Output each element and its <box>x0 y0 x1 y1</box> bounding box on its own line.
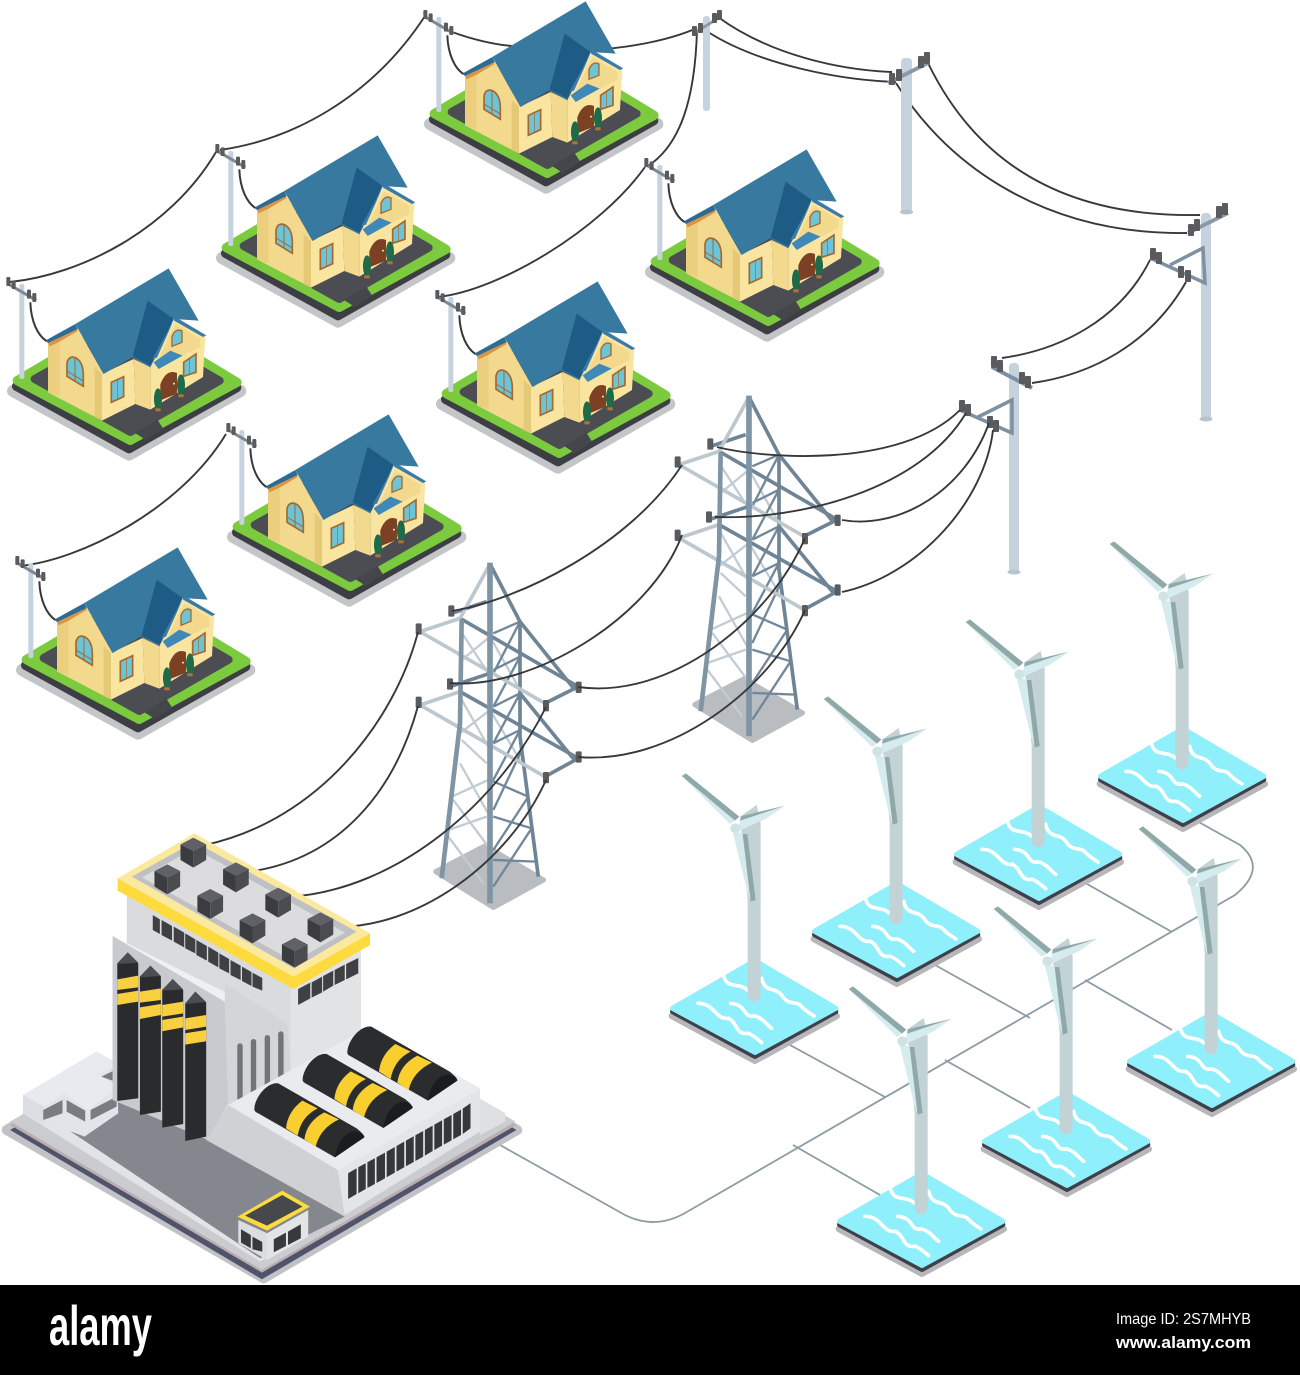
house: lower left <box>15 547 249 734</box>
wind turbine: row 2 second <box>984 906 1149 1194</box>
utility pole: far right <box>1150 203 1228 422</box>
transformer cylinders <box>254 1027 457 1157</box>
yellow striped columns <box>117 952 206 1141</box>
wind turbine: row 1 second <box>814 696 979 984</box>
footer image id: Image ID: 2S7MHYB <box>1116 1311 1251 1328</box>
wind farm ground cables <box>500 820 1253 1222</box>
footer logo text: alamy <box>49 1294 152 1357</box>
transformer hall <box>206 1026 505 1217</box>
house: upper left <box>215 135 449 322</box>
utility pole near top centre <box>692 10 722 111</box>
high voltage wires <box>205 410 993 927</box>
roof with yellow frame <box>118 833 370 989</box>
wind turbine: row 1 third <box>956 619 1121 907</box>
house: centre <box>435 281 669 468</box>
house: top centre <box>423 1 657 188</box>
footer website: www.alamy.com <box>1115 1333 1251 1352</box>
house: lower middle <box>226 414 460 601</box>
utility pole: top right short <box>888 52 930 214</box>
plant base slab <box>7 970 517 1279</box>
wind turbine: row 2 first <box>839 986 1004 1274</box>
roof insulator boxes <box>154 838 333 968</box>
wind turbine: row 2 third <box>1129 826 1294 1114</box>
transmission tower: rear <box>675 396 841 740</box>
utility pole: centre right <box>959 356 1032 574</box>
gatehouse <box>238 1191 310 1260</box>
main hall upper block <box>113 888 361 1140</box>
footer band <box>0 1285 1300 1375</box>
overhead wires: residential network <box>10 16 1200 566</box>
small office block <box>23 1052 118 1137</box>
transmission tower: front <box>416 563 582 907</box>
upper windows <box>153 915 358 1005</box>
wind turbine: front left <box>672 773 837 1061</box>
house: far left <box>6 268 240 455</box>
power plant <box>7 833 517 1279</box>
wind turbine: row 1 fourth <box>1100 541 1265 829</box>
house: upper right <box>644 149 878 336</box>
